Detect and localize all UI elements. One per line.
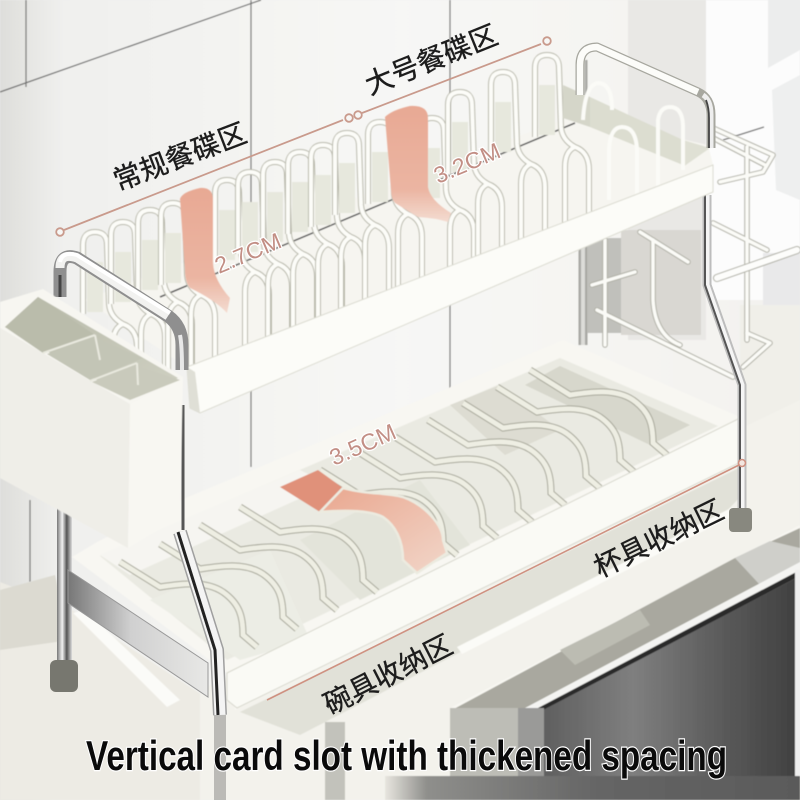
cup compartments — [5, 297, 178, 399]
right foot — [729, 508, 752, 532]
rear left leg with foot — [50, 505, 78, 692]
counter and sink area — [0, 400, 800, 800]
cutting-board panel — [563, 85, 710, 167]
rear right wire hook rack — [583, 60, 797, 377]
right handle — [580, 47, 711, 148]
left handle — [60, 254, 182, 370]
bottom smear — [385, 776, 800, 800]
label: regular plate zone: 常规餐碟区 — [109, 117, 251, 197]
upper shelf supports — [182, 405, 184, 530]
steel sink edge — [452, 528, 800, 710]
upper tray plate wires — [83, 55, 589, 407]
cutting-board wires — [583, 83, 683, 200]
lower tray front band — [227, 418, 741, 708]
pink highlighted lower slot — [280, 470, 447, 573]
pink highlighted upper slot right — [385, 106, 451, 222]
label: bowl storage zone: 碗具收纳区 — [319, 629, 457, 720]
chrome side band — [68, 570, 208, 697]
dark panel — [543, 576, 800, 800]
chrome front post — [178, 532, 220, 800]
chrome rear right post — [705, 195, 742, 512]
cup rim — [0, 289, 183, 404]
dimension: 3.5CM: 3.5CM — [325, 418, 400, 471]
label: large plate zone: 大号餐碟区 — [361, 19, 502, 101]
measure line lower — [267, 460, 746, 700]
dimension: 3.2CM: 3.2CM — [430, 137, 505, 189]
utensil cup — [0, 289, 183, 548]
pink highlighted upper slot left — [180, 188, 230, 313]
dimension: 2.7CM: 2.7CM — [211, 227, 286, 279]
upper tray — [83, 55, 713, 413]
band under lower tray — [240, 465, 745, 735]
lower tray floor — [100, 358, 718, 660]
lower tray wave wires — [120, 370, 667, 647]
label: cup storage zone: 杯具收纳区 — [589, 494, 728, 583]
lower tray — [72, 340, 741, 710]
upper tray front band — [187, 165, 713, 413]
measure line upper — [56, 37, 551, 236]
